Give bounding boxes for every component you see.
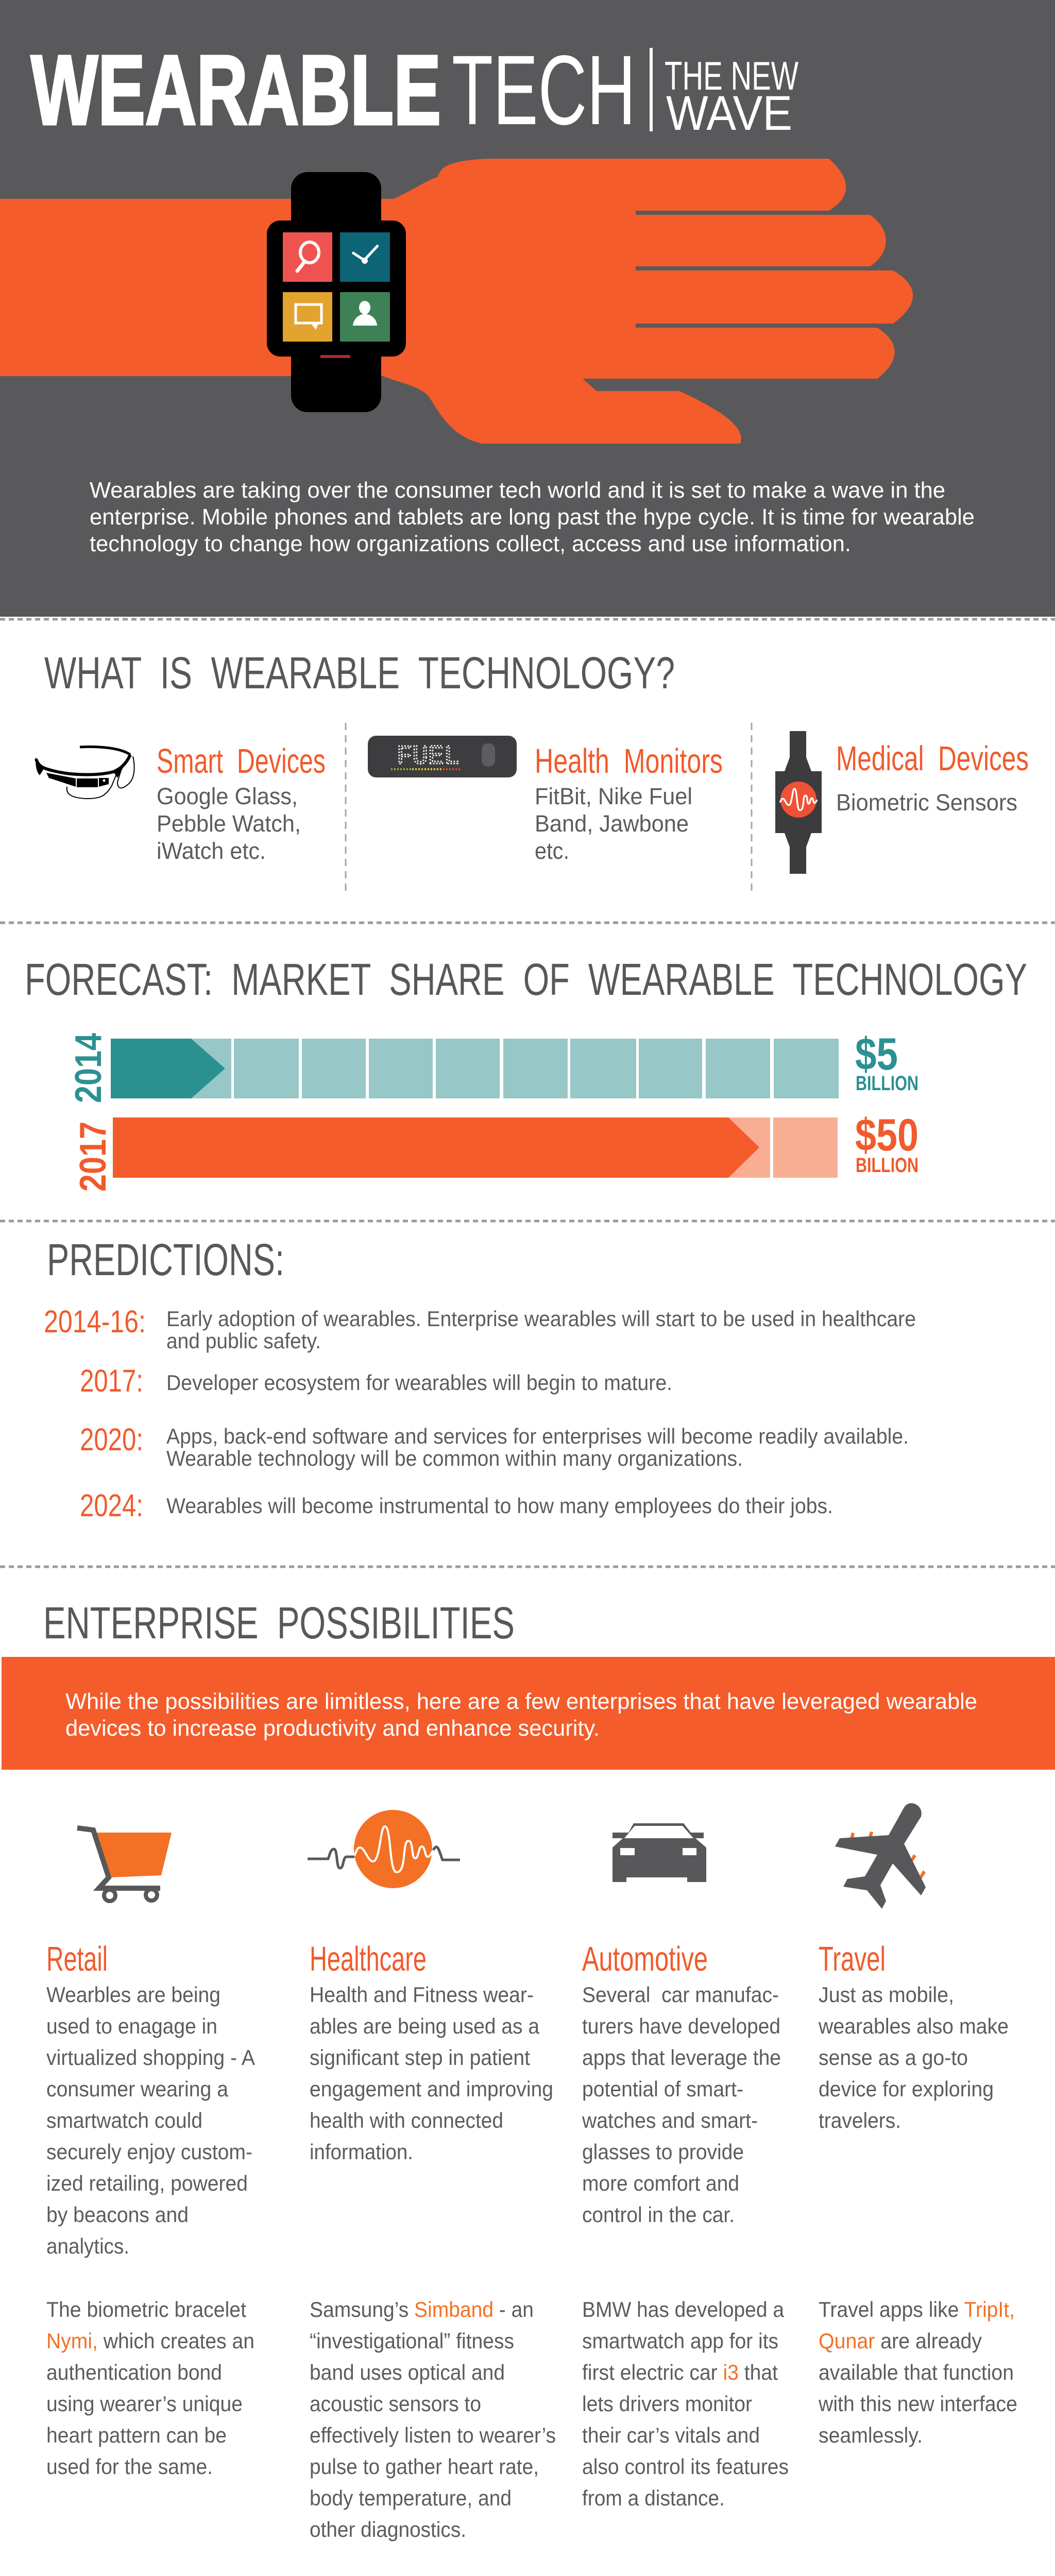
column: retail: using wearer’s unique (46, 2392, 243, 2416)
prediction 2017: 2017: (80, 1363, 143, 1398)
intro text: technology to change how organizations collect, access and use information. (90, 531, 851, 556)
column: retail: The biometric bracelet (46, 2297, 246, 2321)
bar chart: 2014 (68, 1028, 918, 1103)
column: healthcare: ables are being used as a (310, 2014, 540, 2038)
prediction 2014-16: and public safety. (166, 1329, 321, 1353)
column: healthcare: body temperature, and (310, 2486, 512, 2510)
bar chart: 2017 (73, 1109, 918, 1192)
heading: ENTERPRISE POSSIBILITIES (43, 1598, 515, 1648)
bar chart: 2014: BILLION (856, 1072, 918, 1095)
intro text (90, 478, 975, 556)
column: retail: analytics. (46, 2234, 129, 2258)
column: healthcare: health with connected (310, 2108, 503, 2132)
text: health monitors: Health Monitors (535, 742, 723, 781)
column: travel: available that function (819, 2360, 1014, 2384)
column: automotive: also control its features (582, 2454, 789, 2479)
intro text: enterprise. Mobile phones and tablets are long past the hype cycle. It is time for wearable (90, 504, 975, 530)
column: healthcare: other diagnostics. (310, 2517, 466, 2541)
icon: fuel band: FUEL (397, 741, 460, 772)
text: smart devices: Google Glass, (157, 783, 298, 809)
column: automotive: lets drivers monitor (582, 2392, 752, 2416)
column: travel: travelers. (819, 2108, 901, 2132)
column: retail: securely enjoy custom- (46, 2140, 252, 2164)
text: health monitors: Band, Jawbone (535, 810, 689, 837)
column: healthcare (310, 1940, 556, 2541)
column: automotive: smartwatch app for its (582, 2329, 778, 2353)
column: healthcare: Samsung’s Simband - an (310, 2297, 534, 2321)
column: automotive: potential of smart- (582, 2077, 743, 2101)
panel: hero header (0, 0, 1055, 617)
bar chart: 2017: 2017 (73, 1122, 114, 1192)
column: healthcare: Health and Fitness wear- (310, 1982, 534, 2007)
column: travel: with this new interface (818, 2392, 1017, 2416)
text: health monitors: etc. (535, 838, 569, 864)
prediction 2017 (80, 1363, 672, 1398)
column: travel: Just as mobile, (819, 1982, 954, 2007)
prediction 2014-16 (44, 1304, 916, 1353)
column: healthcare: acoustic sensors to (310, 2392, 481, 2416)
bar chart: 2014: 2014 (68, 1033, 109, 1103)
icon: chat tile (283, 292, 332, 342)
column: retail: used for the same. (46, 2454, 213, 2479)
column: retail: consumer wearing a (46, 2077, 229, 2101)
column: automotive: Several car manufac- (582, 1982, 779, 2007)
column: automotive: from a distance. (582, 2486, 725, 2510)
column: automotive: more comfort and (582, 2171, 739, 2195)
prediction 2014-16: Early adoption of wearables. Enterprise wearables will start to be used in healthcare (166, 1307, 916, 1331)
panel: enterprise possibilities (2, 1598, 1055, 2541)
panel: forecast (25, 955, 1027, 1192)
column: retail: Retail (46, 1940, 108, 1978)
text: health monitors: FitBit, Nike Fuel (535, 783, 692, 809)
prediction 2014-16: 2014-16: (44, 1304, 146, 1339)
column: automotive: control in the car. (582, 2202, 735, 2227)
text: smart devices (157, 742, 326, 864)
prediction 2024: Wearables will become instrumental to how many employees do their jobs. (166, 1494, 833, 1518)
column: automotive: first electric car i3 that (582, 2360, 778, 2384)
icon: orange hand (0, 159, 913, 444)
prediction 2020: Apps, back-end software and services for enterprises will become readily available. (166, 1424, 909, 1448)
column: retail: ized retailing, powered (46, 2171, 248, 2195)
column: travel: Travel (819, 1940, 886, 1978)
column: healthcare: “investigational” fitness (310, 2329, 514, 2353)
bar chart: 2017: BILLION (856, 1154, 918, 1177)
column: retail: authentication bond (46, 2360, 222, 2384)
column: automotive (582, 1940, 789, 2510)
column: healthcare: effectively listen to wearer’s (310, 2423, 556, 2447)
icon: smart glasses (36, 747, 134, 799)
column: travel: seamlessly. (819, 2423, 923, 2447)
column: healthcare: information. (310, 2140, 413, 2164)
heading: WHAT IS WEARABLE TECHNOLOGY? (44, 648, 675, 698)
column: retail: by beacons and (46, 2202, 189, 2227)
icon: medical sensor band (775, 731, 822, 874)
icon: airplane (835, 1803, 926, 1909)
column: healthcare: band uses optical and (310, 2360, 505, 2384)
icon: smartwatch (267, 172, 406, 412)
column: automotive: Automotive (582, 1940, 708, 1978)
panel: predictions (44, 1235, 916, 1523)
column: retail: heart pattern can be (46, 2423, 227, 2447)
text: smart devices: Pebble Watch, (157, 810, 301, 837)
callout banner: While the possibilities are limitless, here are a few enterprises that have leveraged wearable (65, 1689, 977, 1714)
heading: PREDICTIONS: (47, 1235, 284, 1285)
column: retail (46, 1940, 255, 2479)
column: travel: Travel apps like TripIt, (819, 2297, 1015, 2321)
title: WAVE (666, 86, 792, 141)
intro text: Wearables are taking over the consumer tech world and it is set to make a wave in the (90, 478, 945, 503)
callout banner: devices to increase productivity and enhance security. (65, 1716, 600, 1741)
title: WEARABLE (31, 35, 441, 145)
bar chart: 2017: $50 (855, 1109, 918, 1160)
column: retail: virtualized shopping - A (46, 2045, 255, 2070)
text: smart devices: Smart Devices (157, 742, 326, 781)
icon: search tile (283, 232, 332, 282)
text: health monitors (535, 742, 723, 864)
column: travel: sense as a go-to (819, 2045, 968, 2070)
column: travel: wearables also make (818, 2014, 1009, 2038)
icon: fuel band (368, 736, 517, 777)
icon: heartbeat (308, 1810, 460, 1888)
column: retail: Wearbles are being (46, 1982, 220, 2007)
column: automotive: apps that leverage the (582, 2045, 781, 2070)
icon: person tile (340, 292, 390, 342)
prediction 2017: Developer ecosystem for wearables will begin to mature. (166, 1370, 672, 1395)
column: travel: Qunar are already (819, 2329, 982, 2353)
callout banner (2, 1657, 1055, 1770)
bar chart: 2014: $5 (855, 1028, 898, 1079)
text: medical devices (836, 739, 1029, 816)
column: healthcare: pulse to gather heart rate, (310, 2454, 539, 2479)
column: healthcare: Healthcare (310, 1940, 427, 1978)
column: travel (818, 1940, 1017, 2447)
column: retail: Nymi, which creates an (46, 2329, 254, 2353)
prediction 2024: 2024: (80, 1488, 143, 1523)
title: THE NEW (665, 53, 798, 98)
icon: clock tile (340, 232, 390, 282)
column: healthcare: significant step in patient (310, 2045, 530, 2070)
panel: what is wearable technology (36, 648, 1029, 892)
column: retail: smartwatch could (46, 2108, 202, 2132)
icon: shopping cart (77, 1828, 172, 1901)
column: automotive: glasses to provide (582, 2140, 744, 2164)
text: smart devices: iWatch etc. (157, 838, 266, 864)
column: retail: used to enagage in (46, 2014, 217, 2038)
text: medical devices: Biometric Sensors (836, 789, 1017, 816)
prediction 2020 (80, 1422, 909, 1470)
prediction 2020: Wearable technology will be common within many organizations. (166, 1446, 743, 1470)
icon: car (612, 1823, 706, 1882)
prediction 2020: 2020: (80, 1422, 143, 1457)
title: TECH (452, 35, 636, 145)
column: travel: device for exploring (819, 2077, 994, 2101)
column: automotive: watches and smart- (582, 2108, 758, 2132)
column: automotive: turers have developed (582, 2014, 780, 2038)
column: healthcare: engagement and improving (310, 2077, 553, 2101)
column: automotive: their car’s vitals and (582, 2423, 760, 2447)
column: automotive: BMW has developed a (582, 2297, 785, 2321)
prediction 2024 (80, 1488, 833, 1523)
